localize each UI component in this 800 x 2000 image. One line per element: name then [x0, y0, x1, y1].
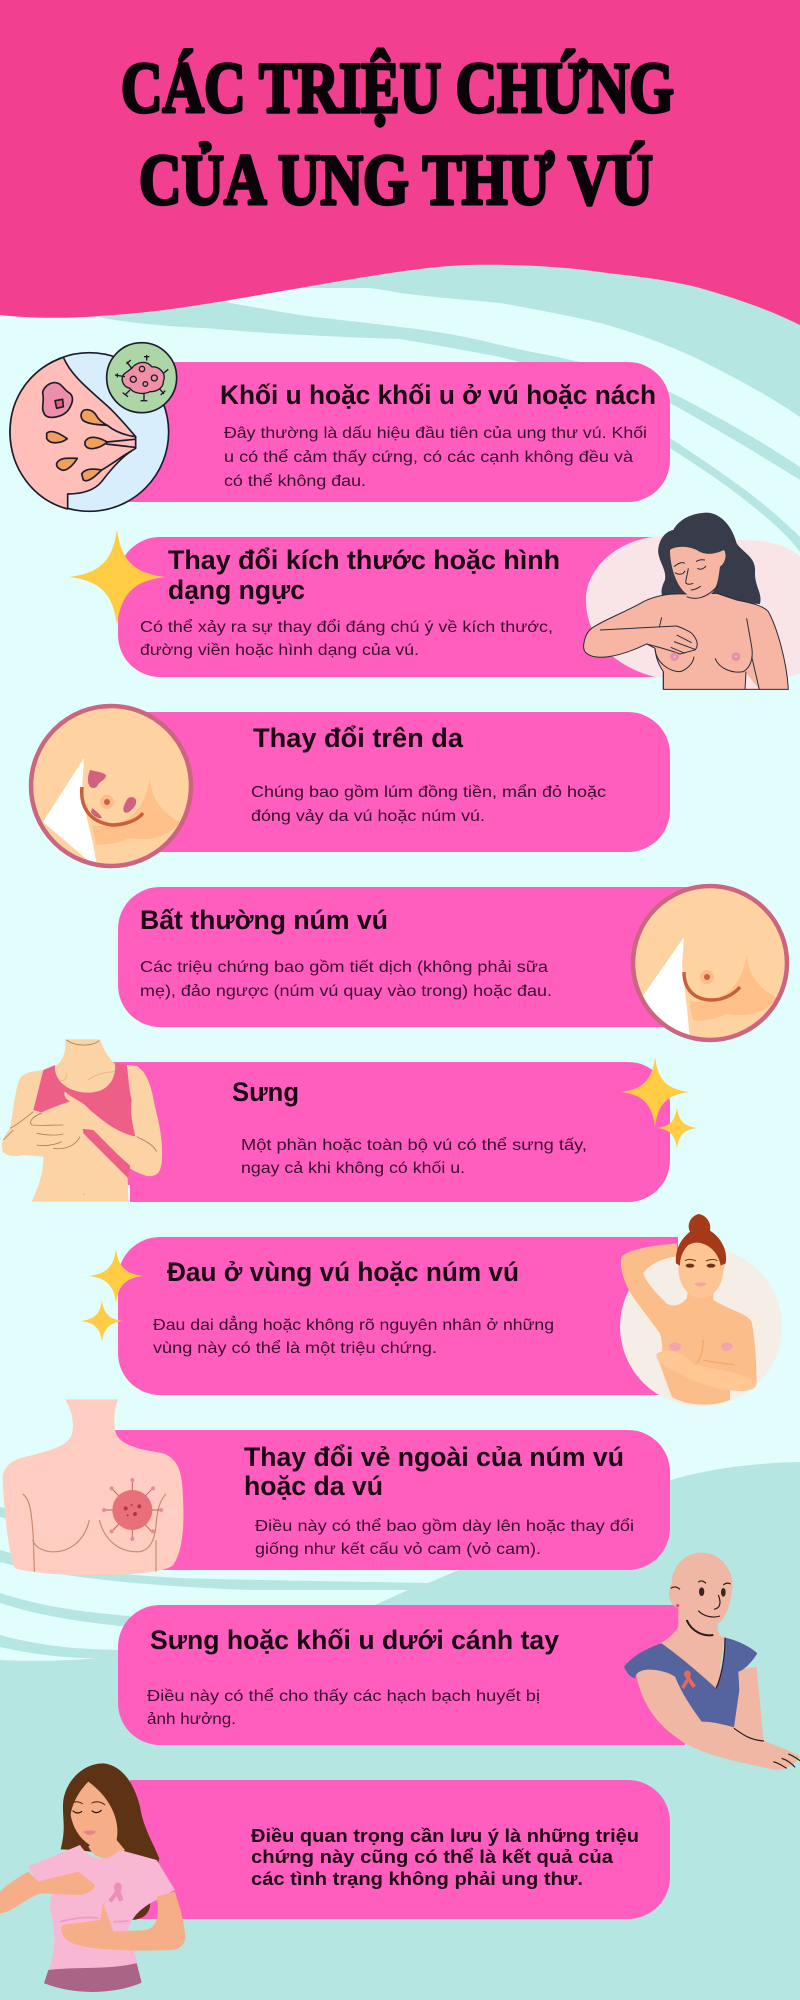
text: size change card: Có thể xảy ra sự thay đổi đáng chú ý về kích thước,: [140, 618, 553, 636]
panel: size change card background: [118, 537, 655, 677]
panel: nipple card background: [118, 887, 700, 1027]
header wave band: [0, 0, 800, 325]
text: note card: [251, 1826, 639, 1889]
title: CÁC TRIỆU CHỨNG: [121, 48, 674, 128]
illustration: woman raising arm: [620, 1214, 782, 1407]
text: size change card: Thay đổi kích thước hoặc hình: [168, 545, 560, 575]
icon: sparkle star: [69, 529, 165, 625]
text: lump card: u có thể cảm thấy cứng, có các cạnh không đều và: [224, 448, 633, 466]
icon: sparkle star upper: [89, 1249, 143, 1303]
text: skin change card: [251, 723, 606, 825]
panel: lump card background: [100, 362, 670, 502]
text: lump card: Đây thường là dấu hiệu đầu tiên của ung thư vú. Khối: [224, 425, 647, 442]
text: underarm card: Điều này có thể cho thấy các hạch bạch huyết bị: [147, 1687, 540, 1705]
illustration: woman checking breast: [584, 513, 800, 689]
icon: sparkle star lower: [81, 1300, 123, 1342]
text: underarm card: ảnh hưởng.: [147, 1711, 236, 1728]
title: [121, 48, 674, 220]
text: appearance card: giống như kết cấu vỏ cam (vỏ cam).: [255, 1541, 541, 1558]
text: size change card: dạng ngực: [168, 575, 305, 605]
title: CỦA UNG THƯ VÚ: [139, 140, 653, 220]
text: swelling card: Một phần hoặc toàn bộ vú có thể sưng tấy,: [241, 1136, 587, 1154]
text: appearance card: hoặc da vú: [244, 1471, 383, 1501]
illustration: woman in pink ribbon shirt: [0, 1763, 185, 1992]
text: swelling card: Sưng: [232, 1077, 299, 1107]
text: underarm card: Sưng hoặc khối u dưới cánh tay: [150, 1625, 559, 1655]
text: skin change card: Thay đổi trên da: [253, 723, 463, 753]
text: nipple card: Các triệu chứng bao gồm tiết dịch (không phải sữa: [140, 959, 548, 976]
text: pain card: vùng này có thể là một triệu chứng.: [153, 1339, 437, 1357]
icon: sparkle star large: [621, 1057, 689, 1127]
illustration: breast nipple close-up: [633, 886, 787, 1045]
text: swelling card: ngay cả khi không có khối u.: [241, 1160, 465, 1177]
text: pain card: Đau ở vùng vú hoặc núm vú: [167, 1257, 519, 1287]
text: appearance card: Thay đổi vẻ ngoài của núm vú: [244, 1442, 624, 1472]
panel: skin change card background: [130, 712, 670, 852]
panel: appearance card background: [115, 1430, 670, 1570]
illustration: torso in pink top: [2, 1039, 162, 1202]
illustration: bald woman with ribbon: [624, 1553, 800, 1770]
illustration: breast with skin changes: [31, 706, 191, 868]
text: lump card: Khối u hoặc khối u ở vú hoặc nách: [220, 380, 656, 410]
illustration: chest with virus mark: [3, 1399, 183, 1575]
panel: note card background: [130, 1780, 670, 1919]
text: size change card: đường viền hoặc hình dạng của vú.: [140, 642, 419, 659]
text: skin change card: đóng vảy da vú hoặc núm vú.: [251, 808, 485, 825]
panel: swelling card background: [113, 1062, 670, 1202]
text: pain card: Đau dai dẳng hoặc không rõ nguyên nhân ở những: [153, 1315, 554, 1334]
text: appearance card: Điều này có thể bao gồm dày lên hoặc thay đổi: [255, 1517, 634, 1535]
text: lump card: [220, 380, 656, 490]
text: nipple card: mẹ), đảo ngược (núm vú quay vào trong) hoặc đau.: [140, 983, 552, 1000]
text: nipple card: [140, 905, 552, 1000]
text: pain card: [153, 1257, 554, 1357]
panel: pain card background: [118, 1237, 678, 1395]
text: underarm card: [147, 1625, 559, 1728]
icon: sparkle star small: [657, 1107, 697, 1149]
text: skin change card: Chúng bao gồm lúm đồng tiền, mẩn đỏ hoặc: [251, 783, 606, 801]
text: swelling card: [232, 1077, 587, 1177]
text: size change card: [140, 545, 560, 659]
panel: underarm card background: [118, 1605, 685, 1745]
text: note card: chứng này cũng có thể là kết quả của: [251, 1847, 614, 1867]
text: lump card: có thể không đau.: [224, 472, 366, 490]
text: note card: các tình trạng không phải ung thư.: [251, 1869, 583, 1889]
text: appearance card: [244, 1442, 634, 1558]
text: nipple card: Bất thường núm vú: [140, 905, 388, 935]
icon: breast anatomy: [10, 343, 177, 511]
text: note card: Điều quan trọng cần lưu ý là những triệu: [251, 1826, 639, 1846]
